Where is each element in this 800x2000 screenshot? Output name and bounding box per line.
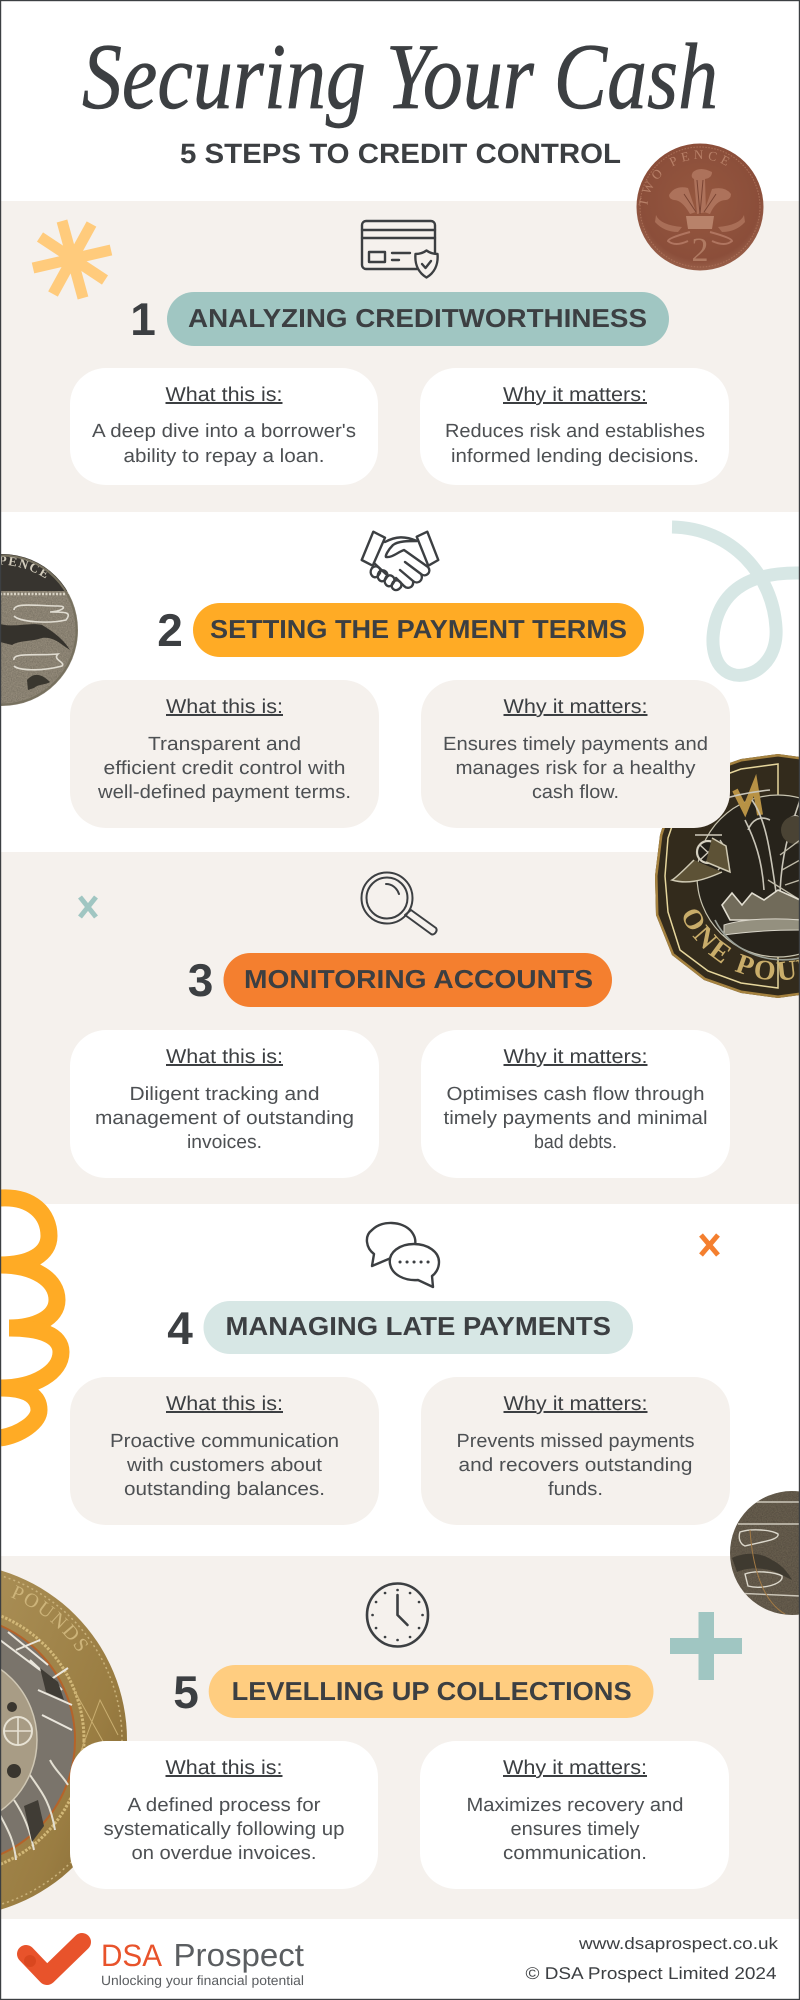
decoration: orange cross — [701, 1235, 718, 1255]
card: what this is: What this is: — [166, 1046, 283, 1068]
card: why it matters: timely payments and minimal — [444, 1108, 708, 1129]
decoration: two pence coin: 2 — [692, 232, 708, 269]
decoration: orange squiggle — [0, 1198, 61, 1438]
card: what this is: A deep dive into a borrower's — [92, 421, 356, 442]
decoration: one pound coin — [655, 754, 799, 998]
section 5 background — [0, 1556, 800, 1919]
card: why it matters — [420, 368, 729, 485]
decoration: right coin fragment — [730, 1491, 799, 1615]
card: what this is — [70, 1741, 378, 1889]
pill: levelling up collections: LEVELLING UP COLLECTIONS — [232, 1676, 632, 1706]
card: what this is: What this is: — [166, 1757, 282, 1779]
icon: magnifying glass — [362, 872, 437, 934]
card: why it matters — [420, 1741, 729, 1889]
card: what this is: What this is: — [166, 1393, 283, 1415]
section 3 — [70, 872, 730, 1178]
card: why it matters: Why it matters: — [504, 696, 648, 718]
icon: credit card with shield — [362, 221, 438, 278]
card: why it matters: informed lending decisions. — [451, 446, 699, 467]
card: why it matters: Maximizes recovery and — [466, 1795, 684, 1816]
decoration: yellow asterisk — [33, 221, 111, 298]
website: www.dsaprospect.co.uk — [578, 1935, 779, 1953]
card: what this is: outstanding balances. — [124, 1479, 325, 1500]
pill: analyzing creditworthiness: ANALYZING CREDITWORTHINESS — [188, 303, 647, 333]
pill: analyzing creditworthiness — [167, 292, 669, 346]
card: what this is: What this is: — [166, 384, 282, 406]
card: what this is: What this is: — [166, 696, 283, 718]
footer — [24, 1935, 779, 1988]
logo: wordmark: DSA — [101, 1938, 162, 1973]
card: why it matters: and recovers outstanding — [458, 1455, 692, 1476]
decoration: two pound coin — [1, 1570, 127, 1910]
card: what this is: A defined process for — [128, 1795, 321, 1816]
card: what this is: Transparent and — [148, 734, 301, 755]
logo: wordmark: Prospect — [174, 1937, 304, 1973]
card: why it matters: Ensures timely payments and — [443, 734, 708, 755]
icon: chat bubbles — [367, 1223, 439, 1287]
card: why it matters — [421, 680, 730, 828]
card: why it matters: Why it matters: — [503, 1757, 647, 1779]
card: what this is: systematically following up — [104, 1819, 344, 1840]
step number 5: 5 — [173, 1666, 199, 1718]
pill: managing late payments: MANAGING LATE PAYMENTS — [226, 1311, 611, 1341]
card: why it matters: Why it matters: — [504, 1393, 648, 1415]
card: what this is — [70, 680, 379, 828]
card: why it matters: communication. — [503, 1843, 647, 1864]
card: why it matters: Reduces risk and establishes — [445, 421, 705, 442]
card: why it matters: Prevents missed payments — [456, 1431, 694, 1452]
pill: setting the payment terms: SETTING THE PAYMENT TERMS — [210, 614, 627, 644]
section 2 — [70, 532, 730, 828]
card: why it matters — [421, 1377, 730, 1525]
pill: monitoring accounts — [224, 953, 612, 1007]
section 1 background — [0, 201, 800, 512]
card: what this is: efficient credit control with — [104, 758, 346, 779]
section 5 — [70, 1584, 729, 1889]
logo: tick mark — [24, 1942, 82, 1976]
icon: handshake — [362, 532, 438, 590]
section 4 — [70, 1223, 730, 1525]
pill: monitoring accounts: MONITORING ACCOUNTS — [244, 964, 593, 994]
card: what this is: invoices. — [187, 1132, 262, 1153]
card: what this is — [70, 368, 378, 485]
step number 3: 3 — [188, 954, 213, 1006]
decoration: teal loop squiggle — [672, 527, 800, 675]
decoration: teal cross — [80, 897, 96, 917]
card: what this is: management of outstanding — [95, 1108, 354, 1129]
card: why it matters: Optimises cash flow through — [446, 1084, 704, 1105]
card: why it matters: cash flow. — [532, 782, 619, 803]
step number 4: 4 — [167, 1302, 193, 1354]
logo: wordmark — [101, 1937, 304, 1988]
pill: levelling up collections — [209, 1665, 653, 1718]
section 1 — [70, 221, 729, 485]
decoration: two pence coin — [636, 144, 764, 270]
copyright: © DSA Prospect Limited 2024 — [526, 1964, 776, 1983]
logo: wordmark: Unlocking your financial potential — [101, 1973, 304, 1988]
subtitle: 5 STEPS TO CREDIT CONTROL — [180, 138, 621, 169]
card: why it matters — [421, 1030, 730, 1178]
step number 2: 2 — [157, 604, 183, 656]
decoration: two pound coin: POUNDS — [10, 1585, 88, 1651]
card: why it matters: ensures timely — [510, 1819, 640, 1840]
step number 1: 1 — [130, 293, 156, 345]
card: why it matters: funds. — [548, 1479, 603, 1500]
pill: setting the payment terms — [193, 603, 644, 657]
card: what this is: well-defined payment terms. — [97, 782, 351, 803]
card: what this is: with customers about — [126, 1455, 323, 1476]
card: why it matters: Why it matters: — [504, 1046, 648, 1068]
decoration: teal plus — [670, 1612, 742, 1680]
section 3 background — [0, 852, 800, 1204]
card: what this is: Diligent tracking and — [130, 1084, 320, 1105]
card: what this is: Proactive communication — [110, 1431, 339, 1452]
card: why it matters: bad debts. — [534, 1132, 617, 1153]
decoration: ten pence coin — [1, 554, 78, 706]
pill: managing late payments — [204, 1301, 633, 1354]
card: what this is: on overdue invoices. — [132, 1843, 316, 1864]
card: what this is — [70, 1377, 379, 1525]
card: why it matters: manages risk for a healthy — [456, 758, 696, 779]
card: what this is: ability to repay a loan. — [124, 446, 324, 467]
card: what this is — [70, 1030, 379, 1178]
decoration: two pence coin: TWO PENCE — [638, 150, 730, 206]
icon: clock — [367, 1584, 428, 1646]
card: why it matters: Why it matters: — [503, 384, 647, 406]
